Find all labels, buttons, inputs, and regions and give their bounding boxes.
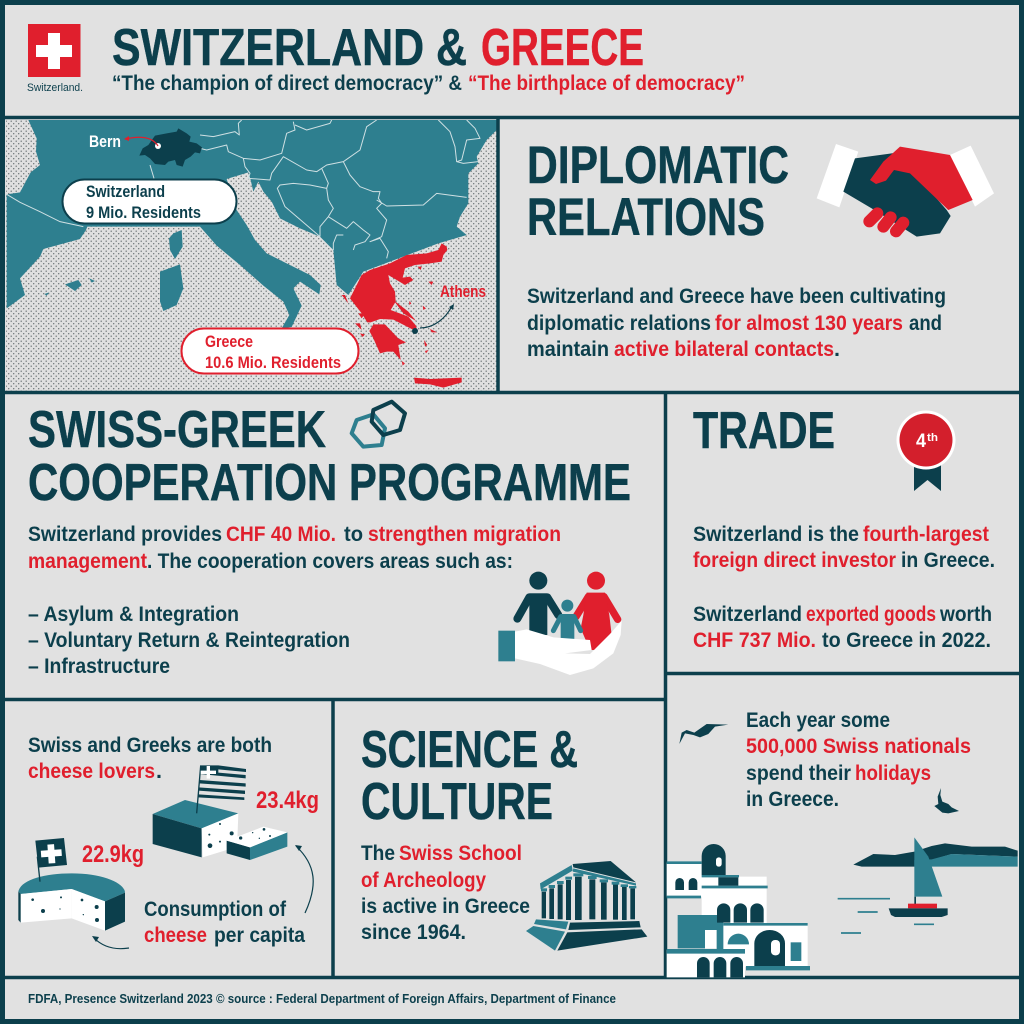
heading: science and culture: [361, 721, 578, 831]
subtitle: “The champion of direct democracy” &: [112, 71, 462, 95]
value: Greece cheese consumption: 23.4kg: [256, 787, 319, 814]
heading: trade: TRADE: [693, 402, 835, 460]
icon: rank badge: 4: [916, 431, 926, 452]
text: holidays: Each year some: [746, 708, 890, 732]
icon: bird two: [934, 788, 959, 813]
callout: Switzerland residents: [62, 180, 236, 224]
marker: Bern: [124, 136, 161, 149]
text: cooperation intro: Switzerland provides: [28, 522, 222, 546]
heading: cooperation programme: [28, 401, 631, 512]
callout: Greece residents: [182, 328, 358, 374]
text: holidays: 500,000 Swiss nationals: [746, 734, 971, 758]
text: cooperation intro: CHF 40 Mio.: [226, 522, 336, 546]
list: cooperation areas: – Asylum & Integration: [28, 602, 239, 626]
text: diplomatic relations: .: [834, 337, 840, 361]
icon: bird one: [679, 724, 728, 744]
list: cooperation areas: – Voluntary Return & Reintegration: [28, 628, 350, 652]
heading: science and culture: SCIENCE &: [361, 721, 578, 779]
label: Bern: Bern: [89, 132, 121, 151]
marker: Athens: [412, 304, 454, 334]
text: trade investor: foreign direct investor: [693, 548, 897, 572]
arrow: to Swiss cheese: [92, 936, 129, 949]
text: trade exports: worth: [939, 602, 992, 626]
text: diplomatic relations: maintain: [527, 337, 609, 361]
callout: Switzerland residents: Switzerland: [86, 183, 165, 201]
icon: family in hand: [498, 572, 622, 675]
heading: diplomatic relations: RELATIONS: [527, 188, 765, 247]
sailboat: [889, 837, 948, 917]
text: trade exports: CHF 737 Mio.: [693, 628, 816, 652]
heading: diplomatic relations: DIPLOMATIC: [527, 136, 789, 195]
footer: source: FDFA, Presence Switzerland 2023 © source : Federal Department of Foreign Affairs, Department of Finance: [28, 992, 616, 1006]
panel: trade: [693, 402, 995, 652]
callout: Switzerland residents: 9 Mio. Residents: [86, 204, 201, 222]
heading: science and culture: CULTURE: [361, 773, 553, 831]
callout: Greece residents: 10.6 Mio. Residents: [205, 354, 341, 372]
text: trade exports: Switzerland: [693, 602, 802, 626]
label: Athens: Athens: [440, 282, 486, 301]
heading: diplomatic relations: [527, 136, 789, 247]
text: Swiss School of Archeology: [361, 841, 530, 944]
panel: science and culture: [361, 721, 647, 951]
subtitle: “The birthplace of democracy”: [468, 71, 745, 95]
text: cooperation intro: management: [28, 549, 147, 573]
text: consumption per capita: Consumption of: [144, 897, 287, 921]
illustration: Swiss cheese with flag: [18, 838, 125, 931]
title: SWITZERLAND &: [112, 19, 467, 77]
text: holidays: [746, 708, 971, 811]
icon: linked hexagons: [352, 402, 405, 447]
text: cheese lovers: Swiss and Greeks are both: [28, 733, 272, 757]
text: trade investor: in Greece.: [901, 548, 995, 572]
panel: holidays: [667, 708, 1018, 977]
value: Switzerland cheese consumption: 22.9kg: [82, 841, 144, 868]
heading: cooperation programme: SWISS-GREEK: [28, 401, 326, 459]
water lines: [838, 899, 934, 933]
village: [667, 844, 810, 977]
panel: cooperation programme: [28, 401, 631, 678]
text: Swiss School of Archeology: of Archeology: [361, 868, 486, 892]
text: consumption per capita: [144, 897, 306, 947]
text: diplomatic relations: diplomatic relations: [527, 311, 711, 335]
subtitle: [112, 71, 745, 95]
text: Swiss School of Archeology: is active in Greece: [361, 894, 530, 918]
logo: Switzerland: Switzerland.: [27, 82, 83, 94]
text: holidays: spend their: [746, 761, 852, 785]
text: trade investor: fourth-largest: [863, 522, 989, 546]
island: [853, 843, 1018, 867]
icon: rank badge: th: [927, 432, 938, 444]
illustration: birds and seaside: [667, 724, 1018, 977]
map: land mass: [7, 120, 497, 328]
panel: cheese: [18, 733, 319, 949]
text: trade exports: [693, 602, 992, 652]
callout: Greece residents: Greece: [205, 333, 253, 351]
text: cheese lovers: .: [156, 759, 162, 783]
map: central and eastern borders: [200, 120, 480, 258]
text: diplomatic relations: Switzerland and Greece have been cultivating: [527, 284, 946, 308]
text: diplomatic relations: active bilateral contacts: [614, 337, 834, 361]
text: cooperation intro: [28, 522, 561, 573]
panel: diplomatic relations: [527, 136, 994, 361]
icon: handshake: [817, 144, 994, 237]
text: consumption per capita: per capita: [214, 923, 306, 947]
text: trade exports: to Greece in 2022.: [822, 628, 991, 652]
heading: cooperation programme: COOPERATION PROGRAMME: [28, 454, 631, 512]
text: consumption per capita: cheese: [144, 923, 207, 947]
text: cheese lovers: cheese lovers: [28, 759, 155, 783]
icon: Greek temple: [526, 861, 647, 951]
arrow: to Greek cheese: [295, 845, 313, 913]
text: diplomatic relations: and: [909, 311, 942, 335]
text: cooperation intro: strengthen migration: [368, 522, 561, 546]
text: cooperation intro: to: [344, 522, 363, 546]
panel: map: [6, 120, 498, 392]
text: holidays: in Greece.: [746, 787, 839, 811]
text: trade investor: Switzerland is the: [693, 522, 859, 546]
text: trade investor: [693, 522, 995, 572]
text: trade exports: exported goods: [806, 602, 936, 626]
map: islands: [44, 230, 183, 311]
title: GREECE: [481, 19, 644, 77]
text: cheese lovers: [28, 733, 272, 783]
logo: Switzerland: [27, 24, 83, 94]
text: diplomatic relations: for almost 130 years: [715, 311, 903, 335]
text: Swiss School of Archeology: Swiss School: [399, 841, 522, 865]
list: cooperation areas: – Infrastructure: [28, 654, 170, 678]
text: cooperation intro: . The cooperation covers areas such as:: [147, 549, 513, 573]
list: cooperation areas: [28, 602, 350, 678]
text: Swiss School of Archeology: since 1964.: [361, 920, 466, 944]
icon: rank badge: [896, 410, 956, 491]
map: Greece: [342, 243, 462, 388]
map: western borders: [7, 165, 154, 227]
map: Switzerland: [139, 128, 202, 167]
illustration: Greek cheese with flag: [153, 765, 287, 860]
text: Swiss School of Archeology: The: [361, 841, 395, 865]
text: holidays: holidays: [855, 761, 931, 785]
text: diplomatic relations: [527, 284, 946, 361]
